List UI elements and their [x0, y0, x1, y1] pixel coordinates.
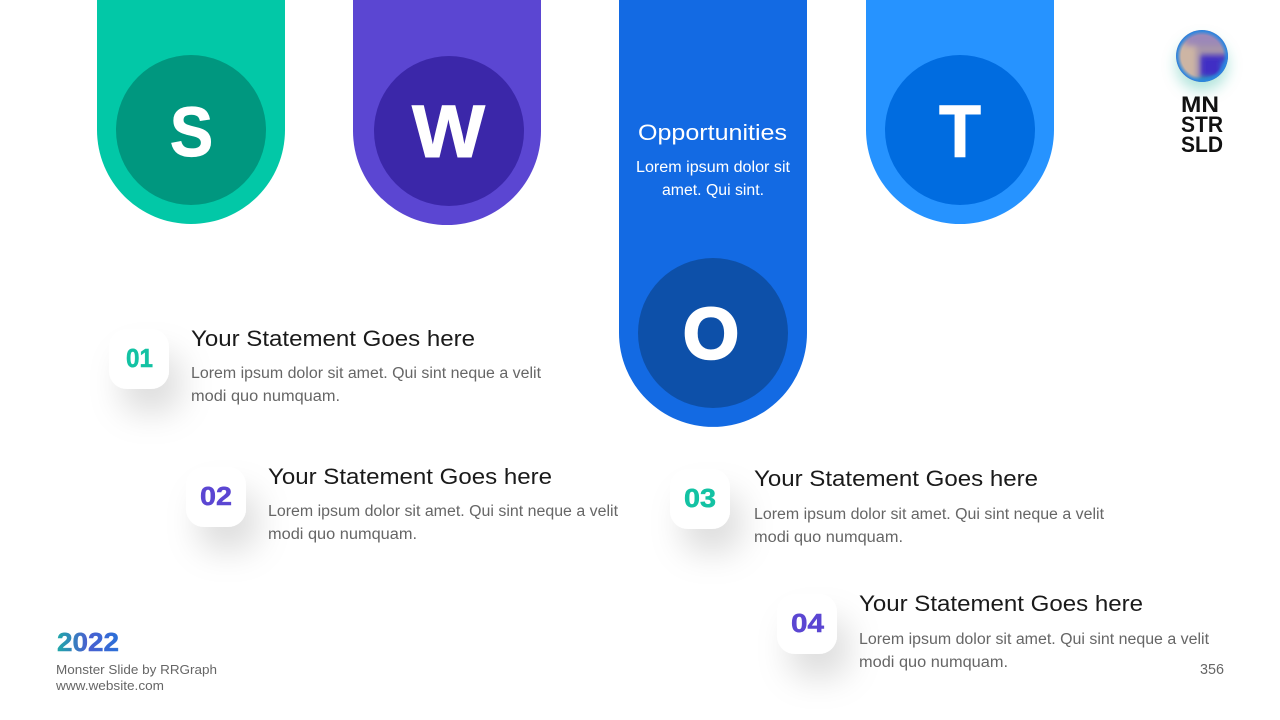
- panel: W weaknesses tab: [353, 0, 541, 225]
- letter S: S: [170, 93, 213, 171]
- text 04: [859, 631, 1210, 671]
- text 02: Lorem ipsum dolor sit amet. Qui sint neque a velit: [268, 503, 619, 520]
- letter T: T: [939, 90, 981, 173]
- text 01: [191, 365, 542, 405]
- text 03: [754, 506, 1105, 546]
- badge 02: [186, 467, 246, 527]
- logo text: [1181, 92, 1223, 157]
- credits: [55, 662, 217, 693]
- opportunities heading: Opportunities: [638, 120, 787, 145]
- badge 01: [109, 329, 169, 389]
- credits: www.website.com: [55, 678, 164, 693]
- opportunities text: [636, 159, 791, 199]
- icon: sphere: [1176, 30, 1230, 85]
- text 04: modi quo numquam.: [859, 654, 1008, 671]
- panel: O opportunities tab: [619, 0, 807, 427]
- year: 2022: [57, 627, 119, 657]
- text 04: Lorem ipsum dolor sit amet. Qui sint neque a velit: [859, 631, 1210, 648]
- logo text: STR: [1181, 112, 1223, 137]
- credits: Monster Slide by RRGraph: [56, 662, 217, 677]
- page number: 356: [1200, 662, 1224, 678]
- text 01: Lorem ipsum dolor sit amet. Qui sint neque a velit: [191, 365, 542, 382]
- opportunities text: amet. Qui sint.: [662, 182, 764, 199]
- heading 03: Your Statement Goes here: [754, 466, 1038, 491]
- heading 01: Your Statement Goes here: [191, 326, 475, 351]
- letter O: O: [683, 294, 739, 374]
- text 03: Lorem ipsum dolor sit amet. Qui sint neque a velit: [754, 506, 1105, 523]
- badge 01: 01: [126, 343, 153, 373]
- badge 04: [777, 594, 837, 654]
- footer: year and credits: [55, 627, 217, 693]
- badge 04: 04: [791, 608, 825, 638]
- logo: [1176, 30, 1230, 157]
- text 02: modi quo numquam.: [268, 526, 417, 543]
- heading 02: Your Statement Goes here: [268, 464, 552, 489]
- text 02: [268, 503, 619, 543]
- panel: T threats tab: [866, 0, 1054, 224]
- badge 03: 03: [684, 483, 716, 513]
- item 01: [109, 326, 542, 405]
- heading 04: Your Statement Goes here: [859, 591, 1143, 616]
- text 03: modi quo numquam.: [754, 529, 903, 546]
- item 02: [186, 464, 619, 543]
- badge 03: [670, 469, 730, 529]
- text 01: modi quo numquam.: [191, 388, 340, 405]
- item 03: [670, 466, 1105, 546]
- item 04: [777, 591, 1210, 671]
- logo text: MN: [1181, 92, 1219, 117]
- panel: S strengths tab: [97, 0, 285, 224]
- logo text: SLD: [1181, 132, 1223, 157]
- opportunities text: Lorem ipsum dolor sit: [636, 159, 791, 176]
- letter W: W: [412, 90, 485, 173]
- badge 02: 02: [200, 481, 232, 511]
